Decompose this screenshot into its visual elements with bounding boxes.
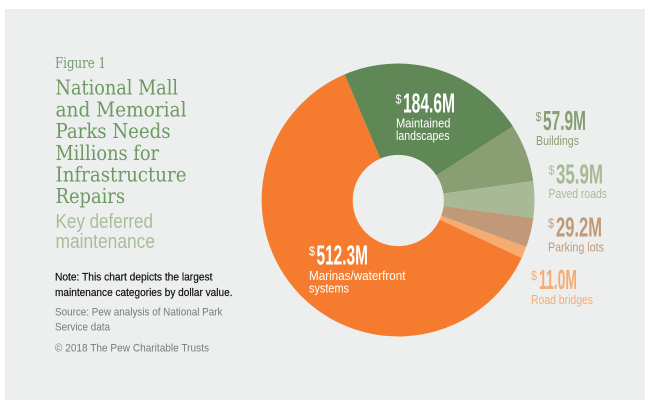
note: Note: This chart depicts the largest bbox=[55, 272, 212, 284]
title: and Memorial bbox=[56, 98, 186, 122]
subtitle: Key deferred bbox=[56, 211, 153, 233]
note: maintenance categories by dollar value. bbox=[55, 287, 232, 299]
label: buildings bbox=[536, 105, 586, 148]
label: paved roads bbox=[548, 158, 607, 201]
label: maintained landscapes: 184.6M bbox=[403, 88, 455, 118]
label: buildings: $ bbox=[536, 109, 542, 124]
label: buildings: Buildings bbox=[536, 134, 579, 148]
label: road bridges: 11.0M bbox=[539, 264, 577, 295]
label: marinas/waterfront systems: $ bbox=[309, 244, 316, 258]
label: paved roads: 35.9M bbox=[556, 158, 603, 190]
title: National Mall bbox=[56, 76, 178, 100]
label: parking lots: $ bbox=[548, 216, 555, 230]
donut hole bbox=[353, 155, 444, 246]
label: parking lots: 29.2M bbox=[556, 212, 602, 242]
label: road bridges: Road bridges bbox=[531, 293, 593, 307]
label: road bridges: $ bbox=[531, 268, 538, 283]
subtitle bbox=[56, 211, 155, 253]
source: Source: Pew analysis of National Park bbox=[55, 306, 223, 318]
label: marinas/waterfront systems bbox=[309, 240, 406, 296]
source: Service data bbox=[55, 322, 111, 334]
label: parking lots: Parking lots bbox=[548, 240, 604, 254]
label: paved roads: Paved roads bbox=[548, 187, 607, 201]
slice: buildings bbox=[398, 126, 533, 200]
label: marinas/waterfront systems: 512.3M bbox=[316, 240, 368, 270]
slice: road bridges bbox=[398, 200, 526, 258]
label: maintained landscapes: Maintained bbox=[396, 116, 451, 130]
source bbox=[55, 306, 223, 334]
slice: paved roads bbox=[398, 181, 535, 218]
label: buildings: 57.9M bbox=[543, 105, 586, 136]
title: Millions for bbox=[56, 141, 159, 165]
title: Parks Needs bbox=[56, 119, 170, 143]
label: maintained landscapes: $ bbox=[396, 92, 402, 106]
label: marinas/waterfront systems: systems bbox=[309, 282, 349, 296]
slice: maintained landscapes bbox=[345, 64, 513, 200]
figure label: Figure 1 bbox=[55, 56, 106, 72]
slice: marinas/waterfront systems bbox=[262, 74, 522, 336]
label: marinas/waterfront systems: Marinas/waterfront bbox=[309, 269, 406, 283]
label: road bridges bbox=[531, 264, 593, 307]
label: maintained landscapes bbox=[396, 88, 455, 143]
note bbox=[55, 272, 232, 299]
slice: parking lots bbox=[398, 200, 533, 247]
label: maintained landscapes: landscapes bbox=[396, 129, 450, 143]
label: paved roads: $ bbox=[548, 162, 555, 178]
donut chart bbox=[262, 64, 535, 336]
title: Infrastructure bbox=[56, 162, 186, 186]
title bbox=[56, 76, 186, 208]
copyright: © 2018 The Pew Charitable Trusts bbox=[55, 342, 209, 354]
title: Repairs bbox=[56, 184, 125, 208]
subtitle: maintenance bbox=[56, 231, 155, 253]
label: parking lots bbox=[548, 212, 604, 254]
